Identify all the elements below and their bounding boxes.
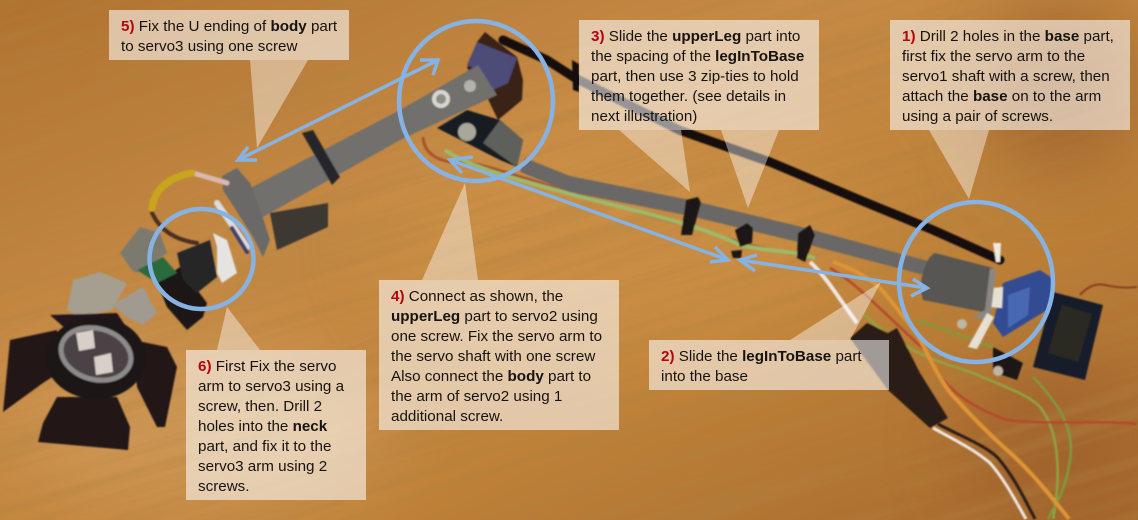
callout 4: upperLeg part to servo2 using: [391, 308, 598, 325]
callout 1: servo1 shaft with a screw, then: [902, 68, 1110, 85]
annotation circles: [150, 21, 1053, 362]
callout 2: 2) Slide the legInToBase part: [661, 348, 862, 365]
callout 4: one screw. Fix the servo arm to: [391, 328, 602, 345]
callout 3: part, then use 3 zip-ties to hold: [591, 68, 799, 85]
callout 4: additional screw.: [391, 408, 503, 425]
base, servo1 and board: [920, 243, 1103, 380]
callout 6: part, and fix it to the: [198, 438, 331, 455]
body part: [222, 65, 497, 257]
callout 6: [186, 350, 366, 500]
callout 3: 3) Slide the upperLeg part into: [591, 28, 800, 45]
callout 6: arm to servo3 using a: [198, 378, 344, 395]
callout 4: the servo shaft with one screw: [391, 348, 595, 365]
callout 1: 1) Drill 2 holes in the base part,: [902, 28, 1114, 45]
callout 4: [379, 280, 619, 430]
callout 4: 4) Connect as shown, the: [391, 288, 563, 305]
callout 1: first fix the servo arm to the: [902, 48, 1085, 65]
neck, servo3 and LED lamp: [3, 227, 237, 450]
callout 6: screw, then. Drill 2: [198, 398, 322, 415]
callout 6: screws.: [198, 478, 249, 495]
callout 2: into the base: [661, 368, 748, 385]
callout 1: using a pair of screws.: [902, 108, 1053, 125]
callout 6: servo3 arm using 2: [198, 458, 327, 475]
servo connector plugs: [850, 323, 948, 428]
yellow tube and neck wires: [152, 173, 247, 252]
callout 5: [109, 10, 349, 60]
black cable: [503, 40, 1000, 260]
callout 4: Also connect the body part to: [391, 368, 591, 385]
zip ties: [681, 197, 815, 262]
callout 5: to servo3 using one screw: [121, 38, 297, 55]
callout 6: holes into the neck: [198, 418, 327, 435]
wires along the leg: [423, 137, 1137, 519]
callout 4: the arm of servo2 using 1: [391, 388, 562, 405]
callout 2: [649, 340, 889, 390]
callout 3: them together. (see details in: [591, 88, 786, 105]
callout 3: [579, 20, 819, 130]
callout pointers: [217, 60, 989, 350]
callout 3: next illustration): [591, 108, 697, 125]
callout 5: 5) Fix the U ending of body part: [121, 18, 337, 35]
double-headed arrows: [238, 60, 927, 296]
callout 3: the spacing of the legInToBase: [591, 48, 804, 65]
callout 6: 6) First Fix the servo: [198, 358, 336, 375]
callout 1: [890, 20, 1130, 130]
callout 1: attach the base on to the arm: [902, 88, 1101, 105]
upper leg: [520, 158, 935, 277]
servo2 joint: [437, 32, 523, 167]
